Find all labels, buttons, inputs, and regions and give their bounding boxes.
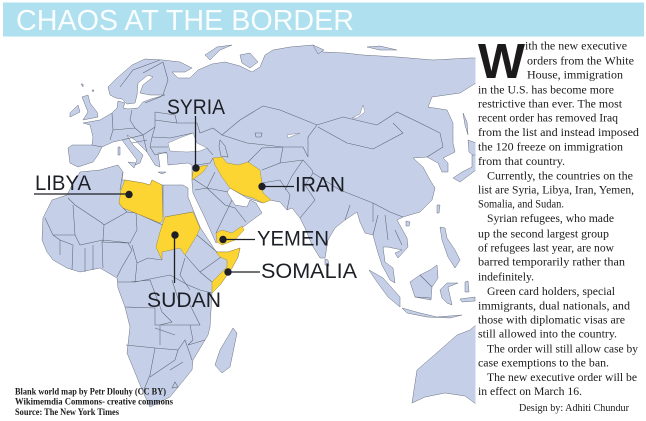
article text: The order will still allow case by [487, 343, 638, 355]
world map [42, 45, 476, 407]
map: Novaya Zemlya and Arctic islands [205, 45, 397, 68]
label: Iran: IRAN [295, 172, 345, 196]
article text: Syrian refugees, who made [487, 213, 614, 225]
title: CHAOS AT THE BORDER [16, 5, 354, 37]
article text: those with diplomatic visas are [478, 314, 625, 326]
map: Japan, Taiwan and Sakhalin [437, 113, 476, 213]
article text: orders from the White [527, 55, 634, 67]
article text: House, immigration [527, 70, 623, 82]
credits: Source: The New York Times [15, 407, 119, 417]
label: Syria [167, 95, 226, 172]
map: Africa [42, 165, 240, 407]
drop cap: W [478, 35, 526, 89]
map: inland seas [168, 105, 365, 152]
designer credit: Design by: Adhiti Chundur [519, 403, 630, 414]
label: Libya: LIBYA [35, 171, 92, 195]
map: Eurasia [68, 45, 476, 283]
article text: up the second largest group [478, 229, 609, 241]
country: Somalia [212, 248, 240, 293]
article text: from that country. [478, 156, 565, 168]
article text: immigrants, dual nationals, and [478, 300, 630, 312]
article text: Somalia, and Sudan. [478, 198, 564, 210]
label: Yemen [219, 226, 329, 250]
article text: ith the new executive [525, 40, 627, 52]
article text: in effect on March 16. [478, 386, 582, 398]
country: Yemen [216, 226, 244, 245]
country: Libya [119, 180, 163, 223]
country: Sudan [156, 212, 200, 260]
label: Libya [34, 171, 133, 198]
article text: of refugees last year, are now [478, 243, 615, 255]
credits [15, 386, 173, 417]
label: Yemen: YEMEN [257, 226, 329, 250]
credits: Wikimemdia Commons- creative commons [15, 397, 173, 407]
map: Great Britain and Ireland [70, 84, 98, 120]
title banner [3, 2, 644, 37]
article text [476, 35, 646, 421]
article text: list are Syria, Libya, Iran, Yemen, [478, 184, 634, 196]
article text: in the U.S. has become more [478, 84, 614, 96]
country: Iran [213, 157, 271, 203]
article text: case exemptions to the ban. [478, 358, 609, 370]
map: Southeast Asia islands [325, 221, 475, 318]
label: Sudan [147, 231, 221, 312]
article text: Currently, the countries on the [487, 170, 633, 182]
article text: the 120 freeze on immigration [478, 142, 623, 154]
country: Syria [192, 165, 208, 180]
article text: barred temporarily rather than [478, 257, 625, 269]
label: Iran [258, 172, 345, 196]
map: Australia [412, 325, 476, 404]
article text: still allowed into the country. [478, 329, 617, 341]
label: Syria: SYRIA [167, 95, 226, 119]
article text: Green card holders, special [487, 286, 615, 298]
article text: indefinitely. [478, 271, 534, 283]
map: Mediterranean islands [118, 147, 166, 174]
article text: restrictive than ever. The most [478, 99, 623, 111]
credits: Blank world map by Petr Dlouhy (CC BY) [15, 386, 166, 396]
label: Somalia: SOMALIA [261, 259, 358, 283]
article text: recent order has removed Iraq [478, 113, 618, 125]
article text: from the list and instead imposed [478, 127, 639, 139]
label: Sudan: SUDAN [147, 288, 221, 312]
article text: The new executive order will be [487, 372, 637, 384]
map: country borders [92, 60, 213, 155]
map: Madagascar [215, 328, 237, 373]
